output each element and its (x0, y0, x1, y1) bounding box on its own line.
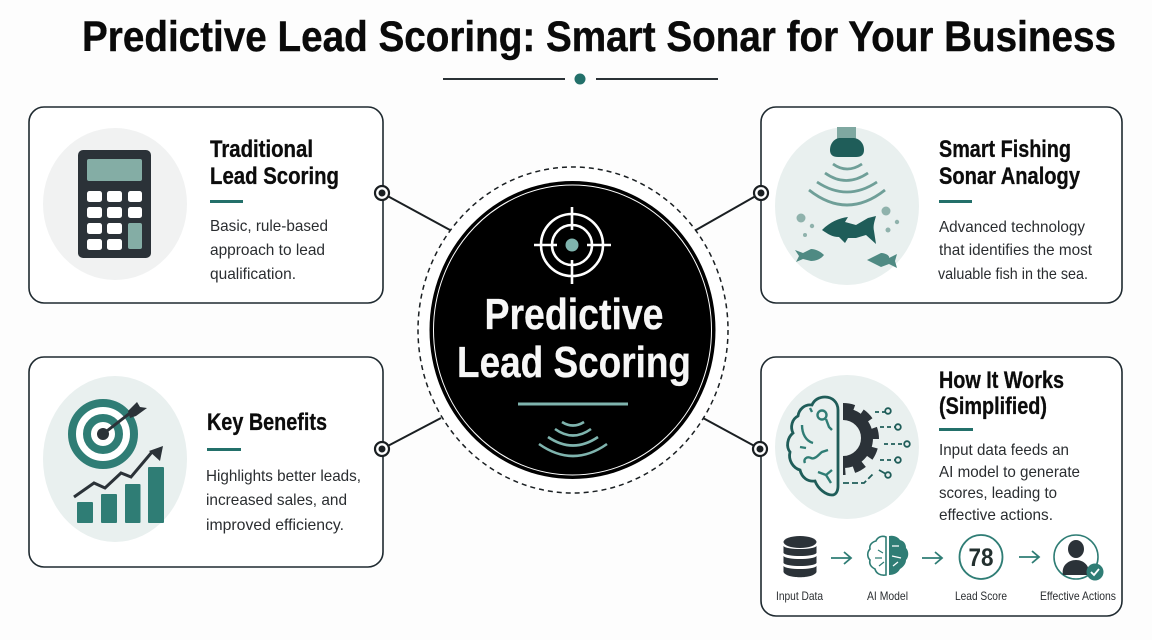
text: benefits description: Highlights better leads, (206, 468, 361, 485)
text: lead score: Lead Score (955, 589, 1007, 603)
heading: key benefits: Key Benefits (207, 409, 327, 436)
icon: sonar waves (539, 422, 607, 456)
heading: how it works: (Simplified) (939, 393, 1047, 420)
heading: how it works: How It Works (939, 367, 1064, 394)
text: how it works description: Input data feeds an (939, 442, 1069, 459)
title divider (443, 74, 718, 84)
icon: calculator (43, 128, 187, 280)
central hub (418, 167, 728, 493)
text: sonar description: that identifies the most (939, 242, 1093, 259)
text: how it works description: scores, leading to (939, 485, 1057, 502)
icon: effective actions (1054, 535, 1104, 580)
icon: input data (784, 536, 816, 577)
text: hub title: Lead Scoring (457, 338, 691, 387)
panel: key benefits (29, 357, 383, 567)
icon: ai model (868, 536, 908, 575)
icon: target and growth chart (43, 376, 187, 542)
text: how it works description: effective actions. (939, 507, 1053, 524)
text: traditional description: approach to lead (210, 242, 325, 259)
icon: crosshair (534, 207, 611, 284)
connectors (382, 193, 761, 449)
connector nodes (375, 186, 768, 456)
heading: smart fishing sonar analogy: Smart Fishing (939, 136, 1071, 163)
text: ai model: AI Model (867, 589, 908, 603)
text: input data: Input Data (776, 589, 823, 603)
arrow: score to actions (1019, 551, 1039, 563)
panel: how it works (761, 357, 1122, 616)
panel: traditional lead scoring (29, 107, 383, 303)
heading: traditional lead scoring: Traditional (210, 136, 313, 163)
icon: lead score (960, 535, 1002, 579)
text: benefits description: improved efficiency. (206, 517, 344, 534)
text: benefits description: increased sales, and (206, 492, 347, 509)
icon: sonar and fish (775, 127, 919, 285)
panel: smart fishing sonar analogy (761, 107, 1122, 303)
text: how it works description: AI model to generate (939, 464, 1080, 481)
text: traditional description: Basic, rule-based (210, 218, 328, 235)
text: hub title: Predictive (484, 290, 664, 339)
arrow: data to model (831, 552, 851, 564)
text: effective actions: Effective Actions (1040, 589, 1116, 603)
arrow: model to score (922, 552, 942, 564)
icon: lead score: 78 (968, 544, 994, 572)
icon: brain and gear (775, 375, 919, 519)
heading: smart fishing sonar analogy: Sonar Analogy (939, 163, 1081, 190)
text: sonar description: valuable fish in the sea. (938, 266, 1088, 283)
text: sonar description: Advanced technology (939, 219, 1085, 236)
text: traditional description: qualification. (210, 266, 296, 283)
heading: traditional lead scoring: Lead Scoring (210, 163, 339, 190)
